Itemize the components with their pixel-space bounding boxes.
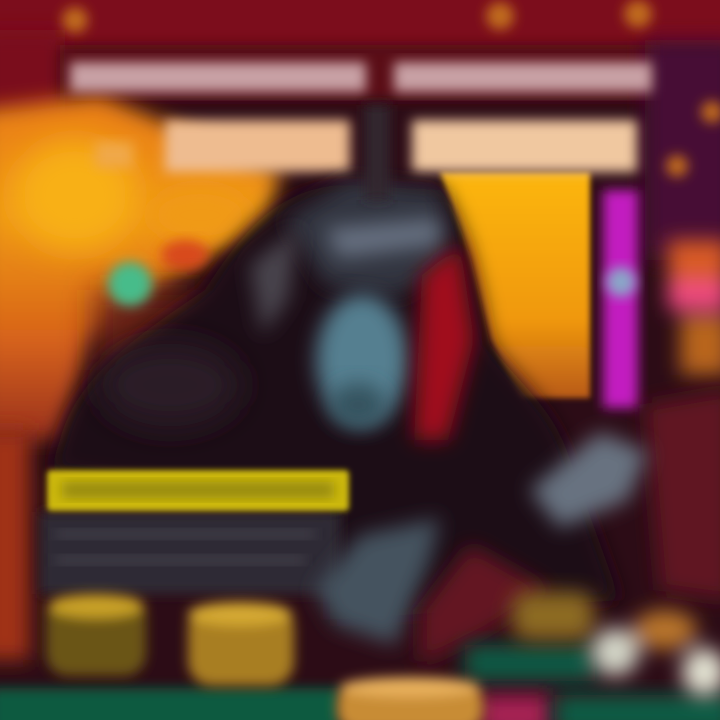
icon: coin stacks: [46, 592, 594, 720]
illustration: gorilla: [50, 105, 620, 620]
panel: magenta vertical bar: [603, 190, 638, 408]
callout: yellow banner: [47, 470, 349, 511]
coin stack bottom: [337, 677, 483, 720]
icon: scattered chips: [591, 610, 720, 696]
table: green felt: [0, 645, 720, 720]
coin stack middle: [188, 602, 294, 686]
coin stack back: [512, 592, 594, 640]
gorilla head: [285, 180, 448, 295]
gorilla body: [50, 185, 620, 620]
heading: two-line title: [70, 62, 652, 172]
coin stack left: [46, 594, 146, 676]
illustration: gorilla hands and red cloth: [315, 390, 720, 665]
fur on shoulder: [250, 228, 298, 335]
dark red shoulder sheen: [100, 343, 240, 427]
red scarf: [414, 245, 474, 440]
muzzle: [316, 294, 408, 426]
decorative top lights: [62, 0, 720, 177]
hat spike: [364, 105, 390, 200]
brow highlight: [325, 218, 440, 258]
panel: dark text block: [40, 512, 340, 594]
panel: right side orange and pink glow: [668, 240, 720, 375]
icon: green badge: [108, 262, 152, 306]
